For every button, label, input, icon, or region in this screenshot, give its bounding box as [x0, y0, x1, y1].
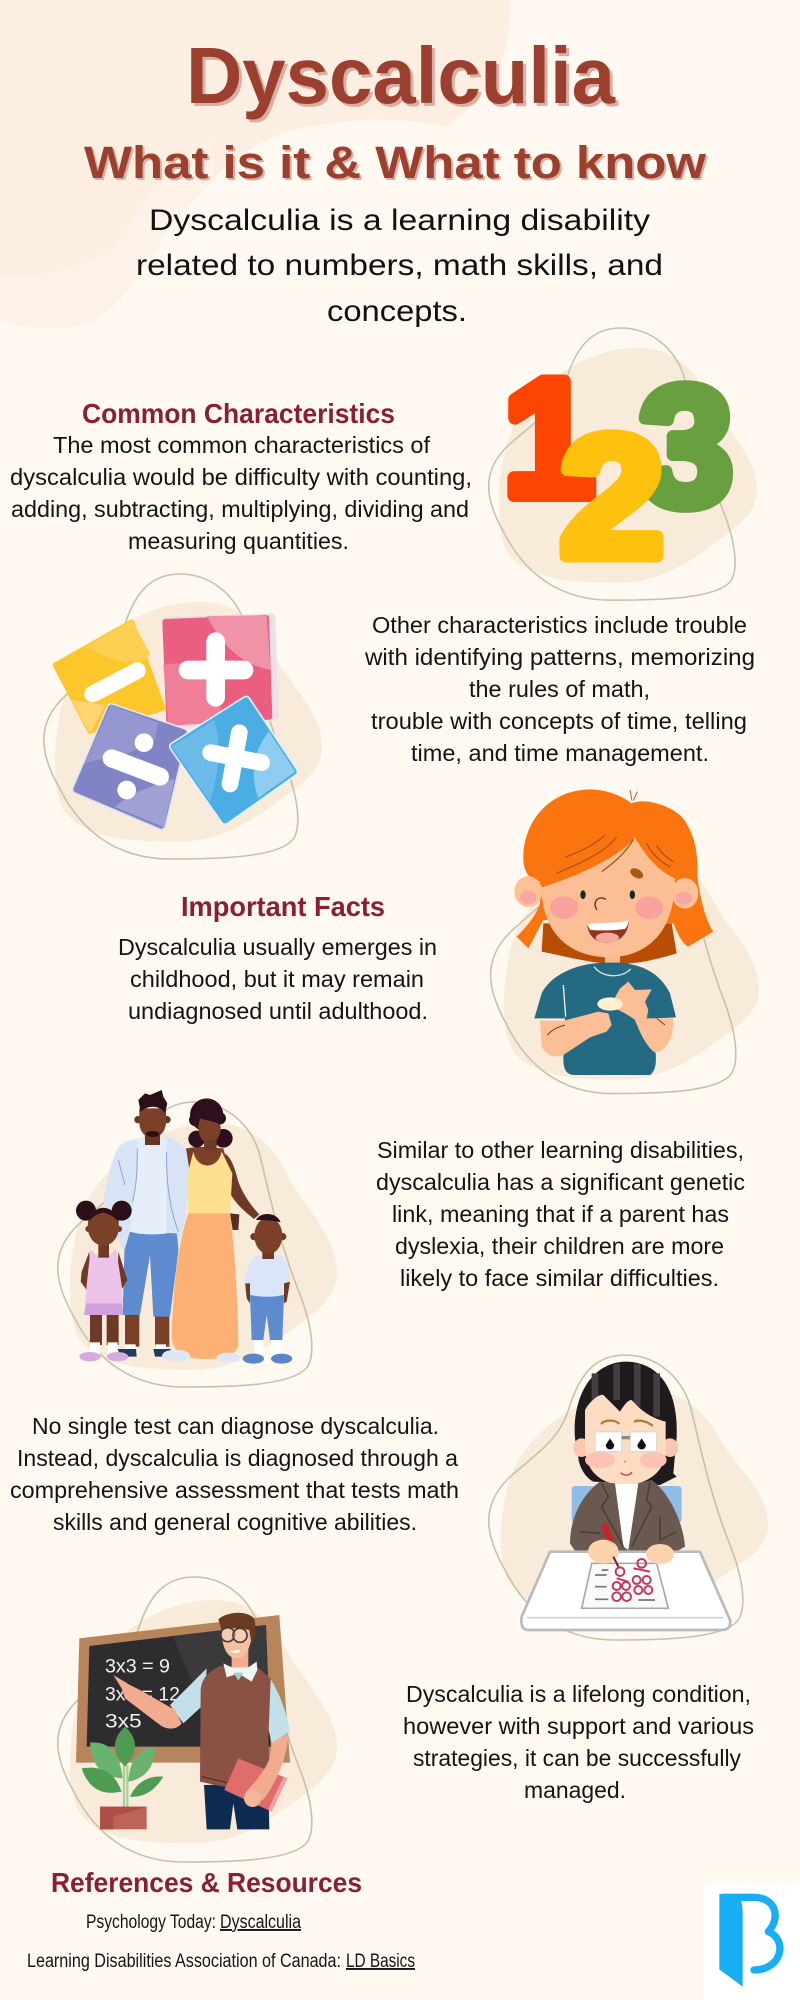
neck: [605, 952, 620, 972]
text: lifelong condition: [403, 1681, 754, 1803]
jacket: [570, 1480, 685, 1558]
text: diagnosis: skills and general cognitive abilities.: [53, 1509, 417, 1535]
ears: [573, 1438, 590, 1457]
card: divide: [77, 705, 183, 827]
hair: [575, 1362, 677, 1485]
icon: math operation cards: [44, 574, 322, 859]
illustration: teacher at chalkboard: [58, 1577, 337, 1862]
text: diagnosis: [10, 1413, 459, 1535]
icon: numbers 123: 1: [504, 346, 594, 530]
mouth: [587, 920, 629, 943]
text: common characteristics: adding, subtracting, multiplying, dividing and: [11, 496, 469, 522]
text: genetic link: Similar to other learning disabilities,: [377, 1137, 744, 1163]
references list: Psychology Today:: [86, 1912, 216, 1933]
desk: [521, 1552, 730, 1630]
illustration: student taking a test: [489, 1355, 768, 1640]
face: [542, 837, 675, 957]
hair strands: [557, 835, 673, 873]
text: diagnosis: Instead, dyscalculia is diagnosed through a: [17, 1445, 458, 1471]
intro text: [136, 204, 663, 328]
hands and pen: [605, 1527, 613, 1547]
icon: numbers 123: [489, 328, 757, 600]
card: plus: [163, 615, 275, 725]
arms and hands: [540, 1012, 612, 1057]
text: important facts: Dyscalculia usually emerges in: [118, 934, 437, 960]
mother: [162, 1098, 259, 1363]
heading: important facts: Important Facts: [181, 891, 385, 922]
chair: [572, 1486, 682, 1523]
text: genetic link: dyscalculia has a significant genetic: [376, 1169, 745, 1195]
logo: [703, 1883, 800, 2000]
text: lifelong condition: managed.: [524, 1777, 626, 1803]
text: lifelong condition: however with support and various: [403, 1713, 754, 1739]
text: diagnosis: No single test can diagnose dyscalculia.: [32, 1413, 439, 1439]
icon: numbers 123: 3: [639, 352, 733, 542]
test paper: [582, 1563, 668, 1608]
text: lifelong condition: strategies, it can be successfully: [413, 1745, 741, 1771]
shirt: [534, 963, 676, 1075]
chalkboard: 3x4 = 12: [105, 1685, 180, 1706]
text: important facts: undiagnosed until adulthood.: [128, 998, 428, 1024]
son: [243, 1214, 292, 1364]
plant: [82, 1727, 163, 1829]
chalkboard: [76, 1615, 290, 1763]
text: other characteristics: [364, 612, 755, 766]
subtitle: What is it & What to know: [84, 137, 707, 188]
text: important facts: childhood, but it may remain: [130, 966, 424, 992]
text: diagnosis: comprehensive assessment that tests math: [10, 1477, 459, 1503]
title: Dyscalculia: [186, 31, 615, 120]
glasses: [595, 1432, 622, 1452]
chalk: equations: 3x3 = 9: [105, 1657, 170, 1678]
intro text: related to numbers, math skills, and: [136, 249, 663, 282]
face: [585, 1395, 666, 1485]
intro text: concepts.: [327, 295, 467, 328]
text: other characteristics: the rules of math,: [469, 676, 650, 702]
intro text: Dyscalculia is a learning disability: [149, 204, 650, 237]
father: [103, 1090, 190, 1357]
text: common characteristics: dyscalculia would be difficulty with counting,: [10, 464, 472, 490]
references list: Learning Disabilities Association of Canada:: [27, 1951, 341, 1972]
heading: common characteristics: Common Characteristics: [82, 398, 395, 429]
text: common characteristics: [10, 432, 472, 554]
illustration: family: [58, 1090, 337, 1387]
top-left background blob: [0, 0, 510, 328]
icon: numbers 123: 2: [560, 401, 664, 593]
text: genetic link: likely to face similar difficulties.: [400, 1265, 719, 1291]
text: other characteristics: trouble with concepts of time, telling: [371, 708, 747, 734]
text: common characteristics: measuring quantities.: [128, 528, 349, 554]
references list: Dyscalculia: [220, 1912, 301, 1933]
teacher: [113, 1613, 290, 1829]
chalkboard: 3x5: [105, 1711, 142, 1732]
references list: LD Basics: [346, 1951, 415, 1972]
illustration: counting girl: [491, 789, 759, 1094]
cheeks: [550, 896, 578, 919]
text: lifelong condition: Dyscalculia is a lifelong condition,: [406, 1681, 751, 1707]
text: other characteristics: Other characteristics include trouble: [372, 612, 747, 638]
text: genetic link: [376, 1137, 745, 1291]
text: common characteristics: The most common characteristics of: [53, 432, 431, 458]
book and hand: [224, 1733, 289, 1812]
text: important facts: [118, 934, 437, 1024]
hair: [517, 789, 713, 948]
eyes, nose and mole: [580, 890, 586, 899]
daughter: [76, 1201, 132, 1361]
text: genetic link: link, meaning that if a parent has: [392, 1201, 729, 1227]
text: genetic link: dyslexia, their children are more: [395, 1233, 724, 1259]
text: other characteristics: with identifying patterns, memorizing: [364, 644, 755, 670]
references list: [27, 1912, 415, 1972]
text: other characteristics: time, and time management.: [411, 740, 709, 766]
card: minus: [55, 620, 163, 733]
card: multiply: [172, 701, 295, 820]
ears: [514, 876, 542, 907]
heading: references: References & Resources: [51, 1867, 362, 1898]
